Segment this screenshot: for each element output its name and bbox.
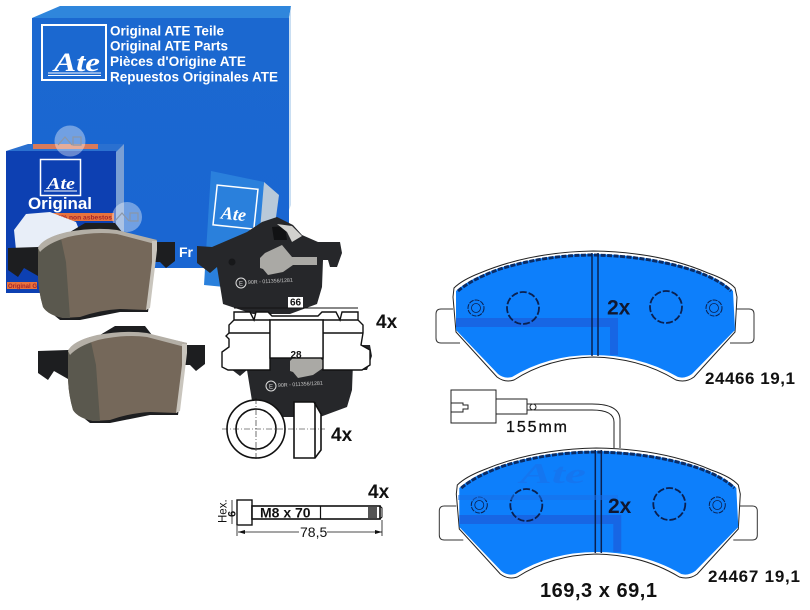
pad dimensions: 169,3 x 69,1 bbox=[540, 580, 657, 602]
dimension 28: 28 bbox=[290, 350, 302, 361]
leaflet bbox=[204, 171, 279, 290]
quantity bottom pad: 2x bbox=[608, 495, 632, 518]
large ATE box bbox=[32, 6, 291, 268]
wear sensor bbox=[451, 390, 620, 448]
bolt drawing: 6 bbox=[226, 511, 238, 517]
bolt length label: 78,5 bbox=[300, 524, 327, 540]
ATE logo on large box bbox=[42, 25, 106, 80]
quantity bolts: 4x bbox=[368, 482, 390, 503]
small box bottom strip: Original G bbox=[8, 284, 37, 290]
small ATE box bbox=[6, 144, 124, 293]
cable length label: 155mm bbox=[506, 419, 567, 436]
small box logo bbox=[40, 160, 80, 196]
leaflet: Ate bbox=[219, 202, 247, 225]
box heading text: Original ATE Teile bbox=[110, 22, 224, 38]
washer drawing bbox=[222, 398, 325, 460]
box heading text: Pièces d'Origine ATE bbox=[110, 53, 246, 69]
quantity top pad: 2x bbox=[607, 296, 631, 320]
ATE logo on large box: Ate bbox=[51, 48, 100, 77]
small box logo: Ate bbox=[46, 174, 76, 193]
bolt size label: M8 x 70 bbox=[260, 504, 311, 520]
quantity clips: 4x bbox=[376, 312, 398, 333]
small box title: Original bbox=[28, 195, 92, 213]
non asbestos strip: 100% non asbestos bbox=[50, 214, 113, 222]
brake pad friction view bottom bbox=[38, 326, 205, 423]
blue pad top bbox=[436, 251, 754, 381]
box heading text: Original ATE Parts bbox=[110, 38, 228, 54]
clip dimension drawing bbox=[222, 297, 370, 370]
box heading text: Repuestos Originales ATE bbox=[110, 68, 278, 84]
quantity washers: 4x bbox=[331, 425, 353, 446]
watermark badges bbox=[54, 126, 142, 232]
dimension 66: 66 bbox=[290, 298, 301, 308]
box heading text bbox=[110, 22, 278, 84]
hex size label: Hex. bbox=[218, 499, 230, 523]
brake pad backing view lower bbox=[227, 320, 372, 417]
brake pad backing view upper bbox=[197, 217, 342, 314]
box side label: Fr bbox=[179, 244, 194, 260]
brake pad friction view top bbox=[8, 223, 175, 320]
part number bottom: 24467 19,1 bbox=[708, 567, 800, 586]
blue pad bottom bbox=[439, 448, 757, 578]
ghost logo on bottom pad: Ate bbox=[517, 459, 586, 490]
part number top: 24466 19,1 bbox=[705, 369, 795, 388]
ghost logo on bottom pad bbox=[458, 459, 618, 500]
bolt drawing bbox=[218, 499, 382, 540]
pad illustration on small box bbox=[14, 212, 80, 250]
